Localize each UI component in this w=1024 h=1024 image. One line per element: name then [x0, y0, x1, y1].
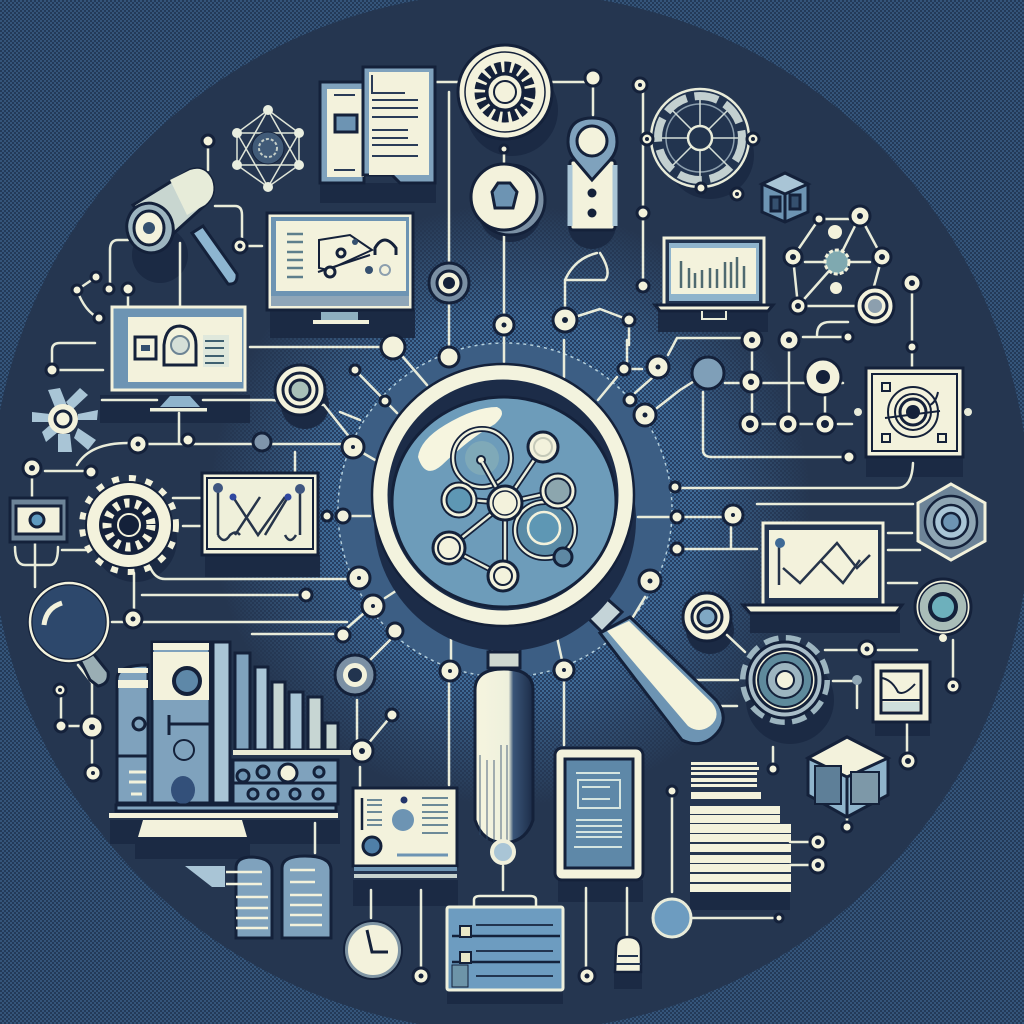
- bookshelf: [109, 642, 351, 837]
- magnifier: lens: [392, 397, 616, 607]
- chart panel: left wave: [202, 473, 318, 555]
- icon: fan star: [32, 388, 98, 452]
- icon: hexagon target: [918, 484, 985, 560]
- icon: large gear left: [82, 478, 176, 572]
- laptop: bar chart: [655, 238, 773, 319]
- icon: magnifier left: [30, 583, 108, 686]
- magnifier: ring: [380, 372, 626, 618]
- icon: ring with hole: [471, 164, 545, 235]
- magnifier: [372, 364, 723, 863]
- icon: wheel: [641, 89, 759, 200]
- icon: small square monitor: [10, 498, 67, 542]
- monitor: left with profile: [112, 307, 245, 412]
- magnifier: diagonal handle: [578, 590, 723, 744]
- icon: target lens: [915, 579, 971, 642]
- connector lines: [15, 82, 953, 968]
- magnifier: shadow: [374, 389, 636, 651]
- panel: small chart: [873, 662, 930, 722]
- magnifier: network in lens: [433, 429, 575, 591]
- document: open book: [320, 67, 435, 183]
- magnifier: glare: [418, 407, 502, 471]
- document: card with emblem: [353, 788, 457, 878]
- icon: 3D box: [808, 737, 888, 817]
- tablet: [555, 748, 643, 880]
- target circles: [275, 263, 841, 937]
- panel: target square: [854, 368, 972, 457]
- icon: small cube: [762, 173, 808, 222]
- icon: clock: [344, 921, 402, 979]
- icon: document stacks bottom left: [185, 856, 331, 938]
- icon: briefcase: [447, 896, 563, 990]
- icon: telescope: [120, 169, 237, 284]
- icon: lock: [615, 937, 641, 972]
- icon: location pin device: [568, 118, 617, 230]
- magnifier: vertical handle: [475, 625, 533, 863]
- icon: gear right: [745, 640, 862, 720]
- icon: stacked text lines: [690, 762, 791, 892]
- laptop: line chart: [743, 523, 902, 613]
- icon: network hexagon: [784, 206, 894, 325]
- icon: molecule upper left: [232, 105, 304, 192]
- monitor: diagram: [267, 213, 413, 324]
- shadows: [93, 64, 963, 1004]
- icon: gear in circle: [458, 45, 552, 139]
